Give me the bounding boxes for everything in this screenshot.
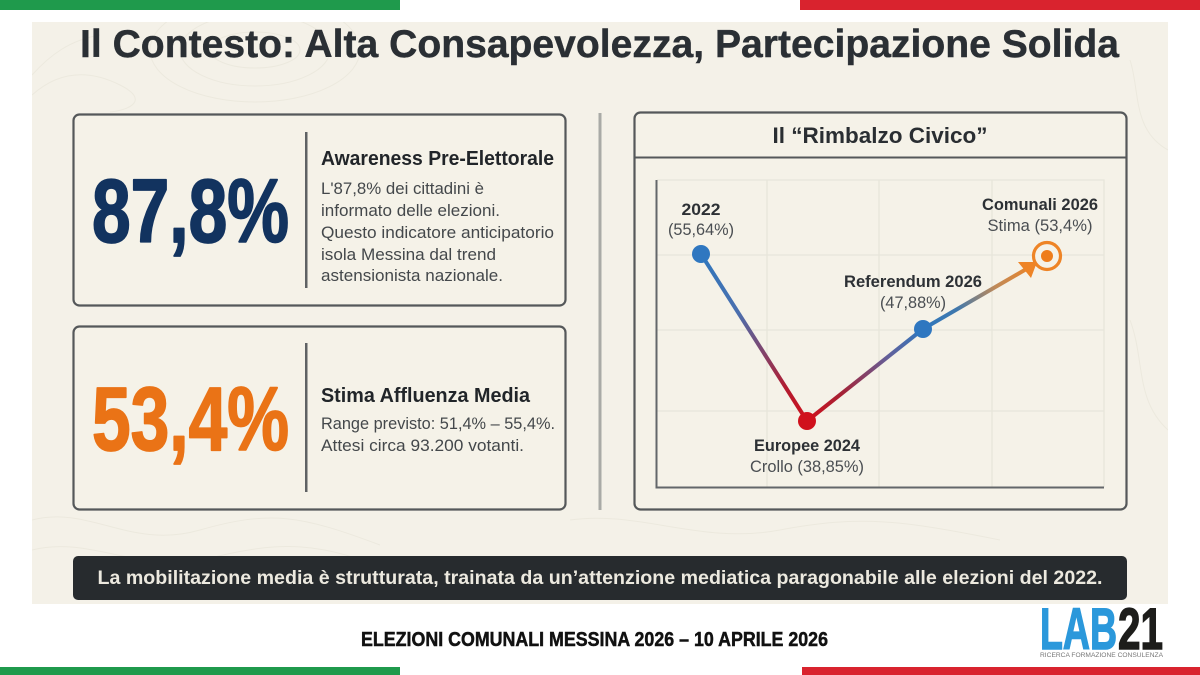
bottom tricolour band [0, 667, 1200, 675]
panel: chart [634, 112, 1126, 510]
line chart [656, 180, 1104, 488]
panel: turnout [74, 326, 566, 510]
label: Europee 2024 [750, 437, 864, 476]
label: 2022: 2022 [682, 201, 720, 219]
conclusion banner [73, 556, 1127, 600]
conclusion banner: La mobilitazione media è strutturata, trainata da un’attenzione mediatica paragonabile alle elezioni del 2022. [98, 568, 1102, 589]
awareness body text: informato delle elezioni. [321, 202, 500, 220]
awareness body text: L'87,8% dei cittadini è [321, 180, 484, 198]
point: Referendum 2026 [914, 320, 932, 338]
top tricolour band [0, 0, 1200, 10]
logo: LAB21: RICERCA FORMAZIONE CONSULENZA [1040, 652, 1164, 659]
label: Referendum 2026: Referendum 2026 [844, 273, 982, 291]
vertical separator [305, 132, 308, 288]
chart title: Il “Rimbalzo Civico” [772, 123, 988, 148]
logo: LAB21: 21 [1118, 597, 1163, 662]
awareness heading: Awareness Pre-Elettorale [321, 148, 554, 170]
label: Referendum 2026: (47,88%) [880, 294, 946, 312]
label: Comunali 2026: Stima (53,4%) [988, 217, 1092, 235]
label: Comunali 2026 [982, 196, 1098, 235]
point: Europee 2024 [798, 412, 816, 430]
awareness body text: isola Messina dal trend [321, 246, 496, 264]
turnout heading: Stima Affluenza Media [321, 385, 531, 407]
turnout body text: Range previsto: 51,4% – 55,4%. [321, 415, 555, 433]
big number: 87,8%: 87,8% [92, 162, 289, 262]
label: Europee 2024: Europee 2024 [754, 437, 861, 455]
label: 2022: (55,64%) [668, 221, 734, 239]
turnout body text [321, 415, 555, 455]
vertical separator [305, 343, 308, 492]
label: Referendum 2026 [844, 273, 982, 312]
turnout body text: Attesi circa 93.200 votanti. [321, 437, 524, 455]
line segments [701, 254, 1035, 421]
awareness body text: astensionista nazionale. [321, 267, 503, 285]
label: 2022 [668, 201, 734, 239]
big number: 53,4%: 53,4% [92, 370, 289, 470]
label: Comunali 2026: Comunali 2026 [982, 196, 1098, 214]
central divider [598, 113, 602, 510]
panel: awareness [74, 114, 566, 306]
arrow head [1018, 262, 1037, 278]
point: Comunali 2026 target [1034, 242, 1060, 270]
logo: LAB21: LAB [1040, 597, 1117, 662]
awareness body text: Questo indicatore anticipatorio [321, 224, 554, 242]
awareness body text [321, 180, 554, 285]
footer caption: ELEZIONI COMUNALI MESSINA 2026 – 10 APRILE 2026 [361, 629, 828, 651]
label: Europee 2024: Crollo (38,85%) [750, 458, 864, 476]
point: 2022 [692, 245, 710, 263]
title: Il Contesto: Alta Consapevolezza, Partecipazione Solida [80, 23, 1119, 66]
